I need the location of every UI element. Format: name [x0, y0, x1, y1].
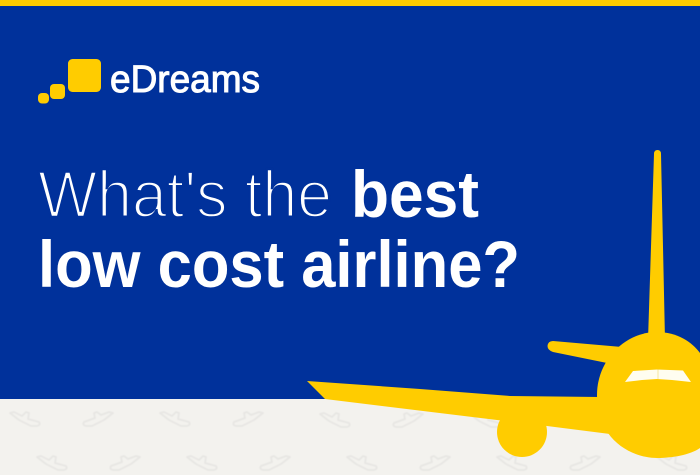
engine: [497, 407, 547, 457]
title line 2: low cost airline?: [38, 227, 520, 301]
logo: eDreams: [38, 59, 260, 104]
title line 1: bold part: best: [351, 157, 479, 231]
tail fin: [648, 150, 665, 340]
logo icon: three squares: [38, 59, 101, 104]
fuselage: [597, 332, 700, 458]
title line 1: light part: What's the: [38, 157, 332, 231]
wing: [307, 381, 640, 440]
rear stabilizer: [548, 341, 622, 364]
airplane illustration: [307, 150, 700, 458]
top yellow bar: [0, 0, 700, 6]
logo wordmark: eDreams: [110, 59, 260, 101]
title: [38, 157, 520, 301]
windshield: [625, 370, 691, 382]
ground band with plane pattern: [0, 399, 700, 475]
